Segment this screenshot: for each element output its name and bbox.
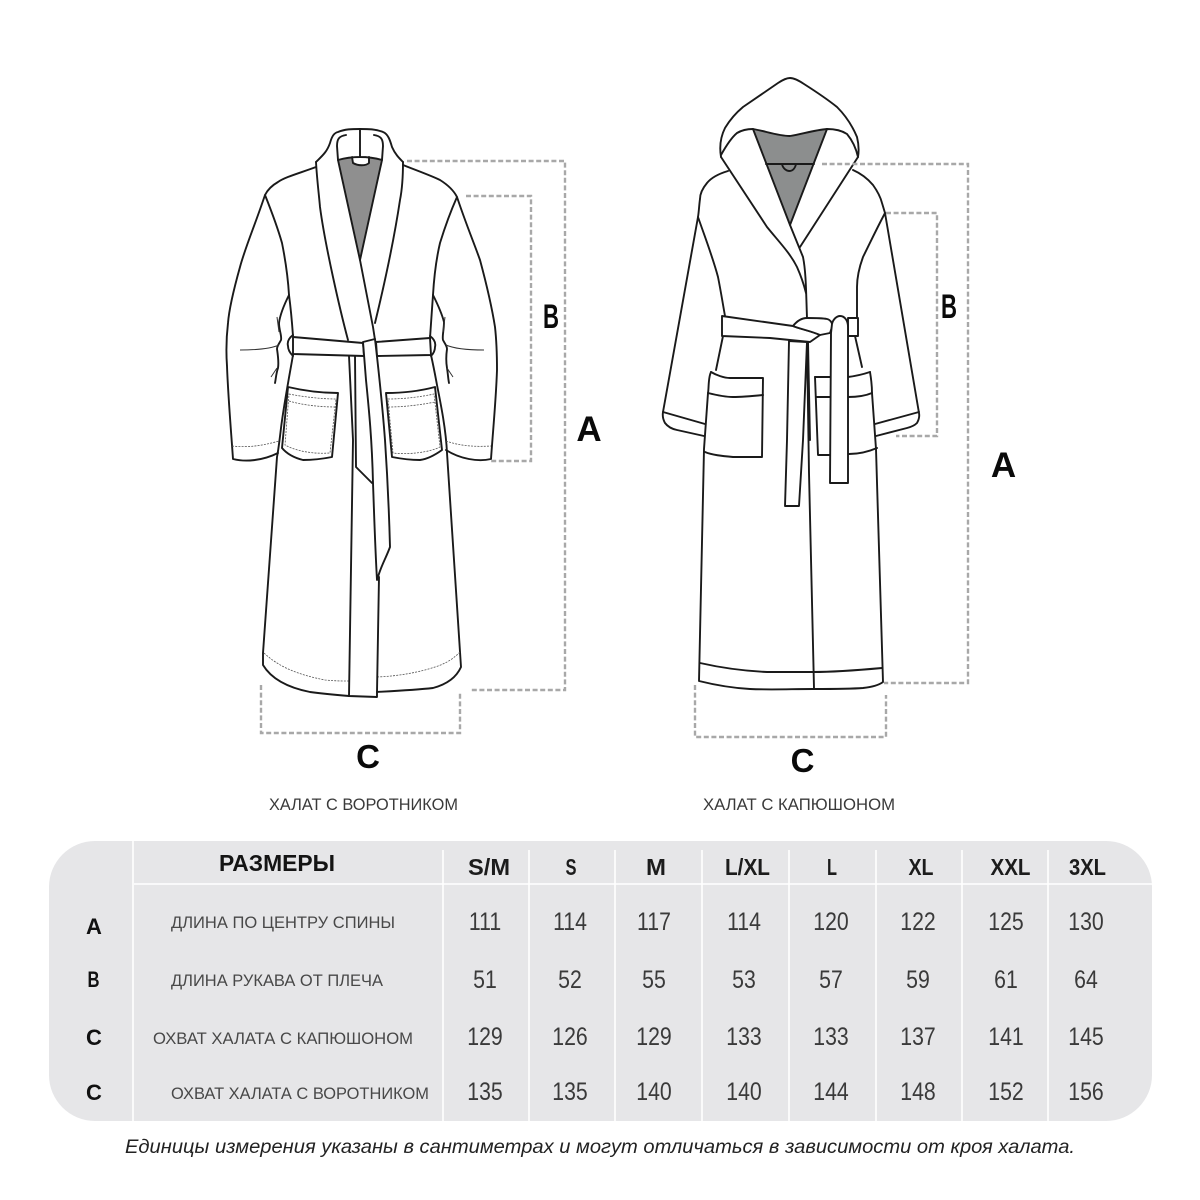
belt and tails xyxy=(288,335,435,696)
table header row: РАЗМЕРЫ xyxy=(219,850,335,876)
row C: collar robe girth: 148 xyxy=(900,1077,936,1105)
row A: back length: 122 xyxy=(900,907,936,935)
row B: sleeve length: ДЛИНА РУКАВА ОТ ПЛЕЧА xyxy=(171,972,383,990)
letter labels: robe with collar xyxy=(356,298,602,775)
table header row: S xyxy=(566,854,576,880)
size table panel xyxy=(49,841,1152,1121)
table header row xyxy=(219,850,1106,880)
footnote: Единицы измерения указаны в сантиметрах и могут отличаться в зависимости от кроя халата. xyxy=(125,1137,1075,1158)
row A: back length: 130 xyxy=(1068,907,1104,935)
letter labels: robe with collar: B xyxy=(543,298,559,336)
table header row: XXL xyxy=(990,854,1030,880)
table header row: S/M xyxy=(468,854,510,880)
collar and lapels xyxy=(316,129,403,340)
robe body and sleeves xyxy=(663,170,919,689)
panel background xyxy=(49,841,1152,1121)
row C: hooded robe girth: 145 xyxy=(1068,1022,1104,1050)
row A: back length: 117 xyxy=(637,907,671,935)
row C: collar robe girth xyxy=(86,1077,1104,1105)
row C: collar robe girth: 156 xyxy=(1068,1077,1104,1105)
row B: sleeve length xyxy=(88,965,1098,993)
row B: sleeve length: 59 xyxy=(906,965,930,993)
row C: collar robe girth: 135 xyxy=(552,1077,588,1105)
dimension lines: hooded robe xyxy=(695,164,968,737)
row B: sleeve length: 53 xyxy=(732,965,756,993)
row C: collar robe girth: 140 xyxy=(636,1077,672,1105)
letter labels: hooded robe: B xyxy=(941,288,957,326)
row B: sleeve length: 57 xyxy=(819,965,843,993)
row C: collar robe girth: ОХВАТ ХАЛАТА С ВОРОТНИКОМ xyxy=(171,1085,429,1103)
illustration: hooded robe xyxy=(663,78,919,689)
pockets xyxy=(282,387,442,460)
row C: collar robe girth: 152 xyxy=(988,1077,1024,1105)
row C: hooded robe girth: 137 xyxy=(900,1022,936,1050)
row C: hooded robe girth: 129 xyxy=(467,1022,503,1050)
row B: sleeve length: 61 xyxy=(994,965,1018,993)
dimension B xyxy=(886,213,937,436)
pockets xyxy=(705,372,877,457)
table grid xyxy=(133,841,1152,1121)
dimension A xyxy=(407,161,565,690)
letter labels: robe with collar: C xyxy=(356,738,380,775)
row C: hooded robe girth: 133 xyxy=(813,1022,849,1050)
row A: back length: 120 xyxy=(813,907,849,935)
row B: sleeve length: 51 xyxy=(473,965,497,993)
dimension C xyxy=(695,685,886,737)
row C: collar robe girth: 135 xyxy=(467,1077,503,1105)
neck opening in grey xyxy=(338,157,382,260)
table header row: L xyxy=(827,854,837,880)
table header row: 3XL xyxy=(1069,854,1106,880)
row A: back length: 114 xyxy=(727,907,761,935)
dimension C xyxy=(261,685,460,733)
hood xyxy=(720,78,859,318)
row A: back length: ДЛИНА ПО ЦЕНТРУ СПИНЫ xyxy=(171,914,395,932)
caption: hooded robe: ХАЛАТ С КАПЮШОНОМ xyxy=(703,796,895,814)
row C: hooded robe girth: 126 xyxy=(552,1022,588,1050)
row A: back length: 125 xyxy=(988,907,1024,935)
belt and tails xyxy=(722,316,858,506)
row A: back length: 111 xyxy=(469,907,501,935)
table header row: M xyxy=(646,854,666,880)
row C: hooded robe girth: C xyxy=(86,1025,102,1050)
row C: hooded robe girth: 129 xyxy=(636,1022,672,1050)
row C: hooded robe girth: 141 xyxy=(988,1022,1024,1050)
letter labels: robe with collar: A xyxy=(576,410,602,449)
row B: sleeve length: 64 xyxy=(1074,965,1098,993)
row A: back length xyxy=(86,907,1104,939)
row C: hooded robe girth: 133 xyxy=(726,1022,762,1050)
row C: hooded robe girth xyxy=(86,1022,1104,1050)
row C: collar robe girth: C xyxy=(86,1080,102,1105)
table header row: L/XL xyxy=(725,854,770,880)
letter labels: hooded robe: C xyxy=(791,742,814,779)
row C: collar robe girth: 140 xyxy=(726,1077,762,1105)
dimension lines: robe with collar xyxy=(261,161,565,733)
row B: sleeve length: 55 xyxy=(642,965,666,993)
row C: hooded robe girth: ОХВАТ ХАЛАТА С КАПЮШОНОМ xyxy=(153,1030,413,1048)
letter labels: hooded robe: A xyxy=(991,446,1016,485)
illustration: robe with shawl collar xyxy=(226,129,497,697)
dimension A xyxy=(822,164,968,683)
table header row: XL xyxy=(908,854,934,880)
caption: robe with collar: ХАЛАТ С ВОРОТНИКОМ xyxy=(269,796,458,814)
robe body and sleeves xyxy=(226,165,497,697)
row B: sleeve length: B xyxy=(88,967,100,992)
letter labels: hooded robe xyxy=(791,288,1016,779)
dimension B xyxy=(466,196,531,461)
row A: back length: A xyxy=(86,914,102,939)
row B: sleeve length: 52 xyxy=(558,965,582,993)
row A: back length: 114 xyxy=(553,907,587,935)
row C: collar robe girth: 144 xyxy=(813,1077,849,1105)
